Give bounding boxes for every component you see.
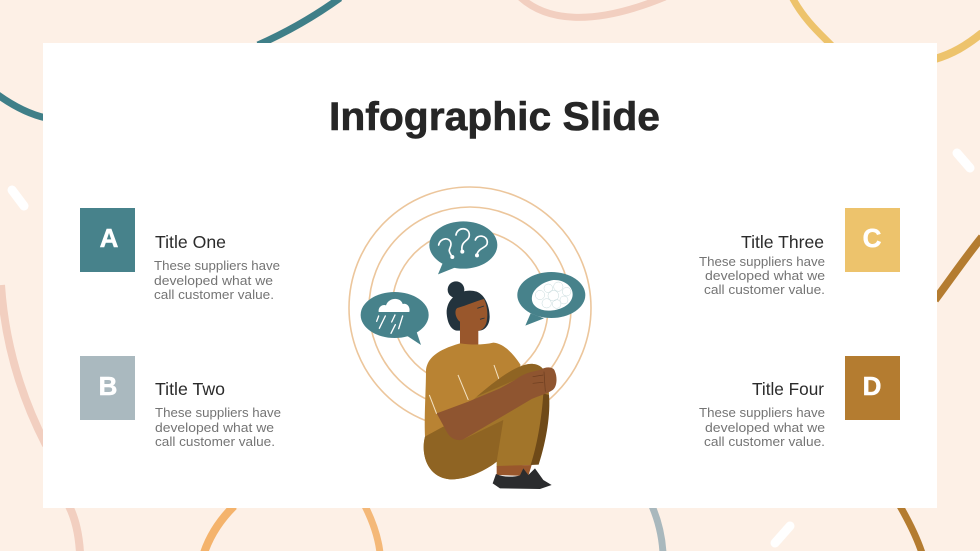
description A: These suppliers have [154,258,280,273]
heading: Title Three: Title Three [741,232,824,252]
description D: developed what we [705,420,825,435]
badge D [845,356,900,420]
description B: developed what we [155,420,274,435]
item D [699,356,900,449]
item A [80,208,280,302]
trousers [424,364,549,479]
body [424,343,557,489]
badge C: C [863,223,882,253]
white content panel [43,43,937,508]
description A: call customer value. [154,287,274,302]
title: Infographic Slide [329,95,660,139]
description B: These suppliers have [155,405,281,420]
shoes [493,468,552,489]
seated person illustration [424,281,557,489]
thigh shade [424,420,503,479]
concentric rings [349,187,591,429]
description D: call customer value. [704,434,825,449]
description A: developed what we [154,273,273,288]
speech bubble: question marks [429,221,497,274]
badge A: A [100,223,119,253]
heading: Title Two: Title Two [155,379,225,399]
knee shade [477,364,546,397]
heading: Title Four: Title Four [752,379,824,399]
shirt crease lines [429,365,499,414]
badge C [845,208,900,272]
badge B: B [99,371,117,401]
hair [447,291,490,331]
hair bun [448,281,464,298]
description D: These suppliers have [699,405,825,420]
arm and hand [437,367,557,440]
description C: call customer value. [704,282,825,297]
closed eye and mouth [477,306,485,319]
item C [699,208,900,297]
description C: These suppliers have [699,254,825,269]
description C: developed what we [705,268,825,283]
face and neck [455,299,487,347]
speech bubble: rain cloud [361,292,429,345]
description B: call customer value. [155,434,275,449]
finger lines [533,372,545,392]
lower leg shadow [531,393,549,465]
item B [80,356,281,449]
speech bubble: tangled scribble [517,272,585,326]
lower leg skin [497,465,532,476]
badge B [80,356,135,420]
shirt [425,343,521,437]
badge A [80,208,135,272]
heading: Title One: Title One [155,232,226,252]
badge D: D [863,371,881,401]
head [447,281,490,347]
